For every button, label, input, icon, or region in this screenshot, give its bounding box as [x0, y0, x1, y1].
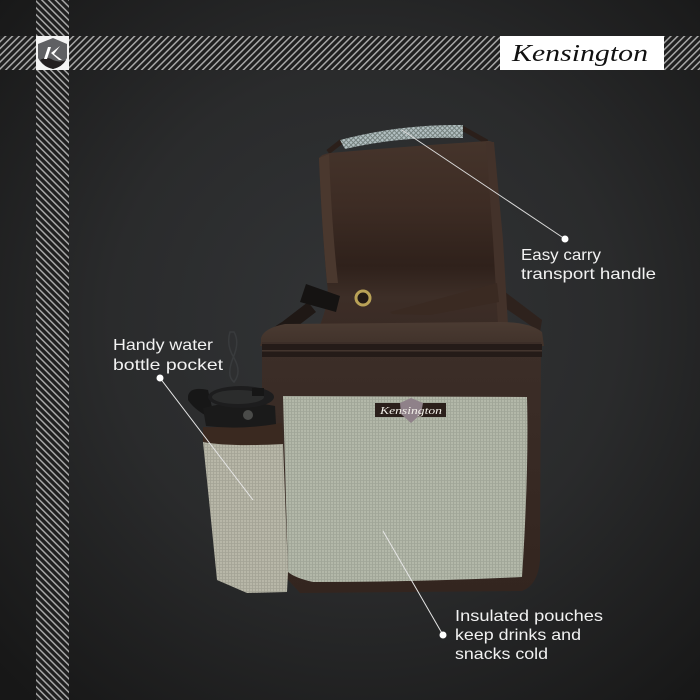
back strap left [262, 302, 316, 346]
horizontal striped band [0, 36, 700, 70]
callout: transport handle: transport handle [521, 266, 656, 283]
product: bag [188, 125, 544, 593]
flap stitched border left [319, 154, 338, 283]
ghost carabiner reflection [229, 332, 238, 382]
vertical striped band [36, 0, 69, 700]
callout: water bottle pocket: Handy water [113, 337, 214, 354]
callout: transport handle: Easy carry [521, 247, 601, 264]
carry handle loop [328, 128, 487, 152]
pocket brown band [203, 423, 283, 446]
grommet [356, 291, 370, 305]
side strap right [505, 292, 542, 332]
flap [319, 141, 508, 325]
callout: transport handle [402, 130, 656, 283]
front panel [283, 396, 527, 582]
brand logo: Kensington [500, 36, 664, 70]
callout: water bottle pocket [113, 337, 253, 500]
side pocket [203, 442, 288, 593]
callout: insulated pouches: Insulated pouches [455, 608, 603, 625]
icon: Kensington K shield logo [36, 36, 69, 70]
brand logo: Kensington: Kensington [511, 41, 648, 67]
main body [262, 342, 541, 593]
bag label: Kensington [379, 405, 443, 417]
buckle [300, 284, 340, 312]
callout: insulated pouches: keep drinks and [455, 627, 581, 644]
flap stitched border right [486, 142, 508, 325]
callout: insulated pouches: snacks cold [455, 646, 548, 663]
bag label [375, 398, 446, 423]
handle [340, 125, 463, 149]
lid [260, 322, 544, 346]
zipper [262, 344, 542, 357]
zipper line [262, 350, 542, 352]
callout: insulated pouches [383, 531, 603, 663]
flap strap [390, 283, 499, 315]
water bottle [188, 386, 276, 428]
callout: water bottle pocket: bottle pocket [113, 357, 224, 374]
